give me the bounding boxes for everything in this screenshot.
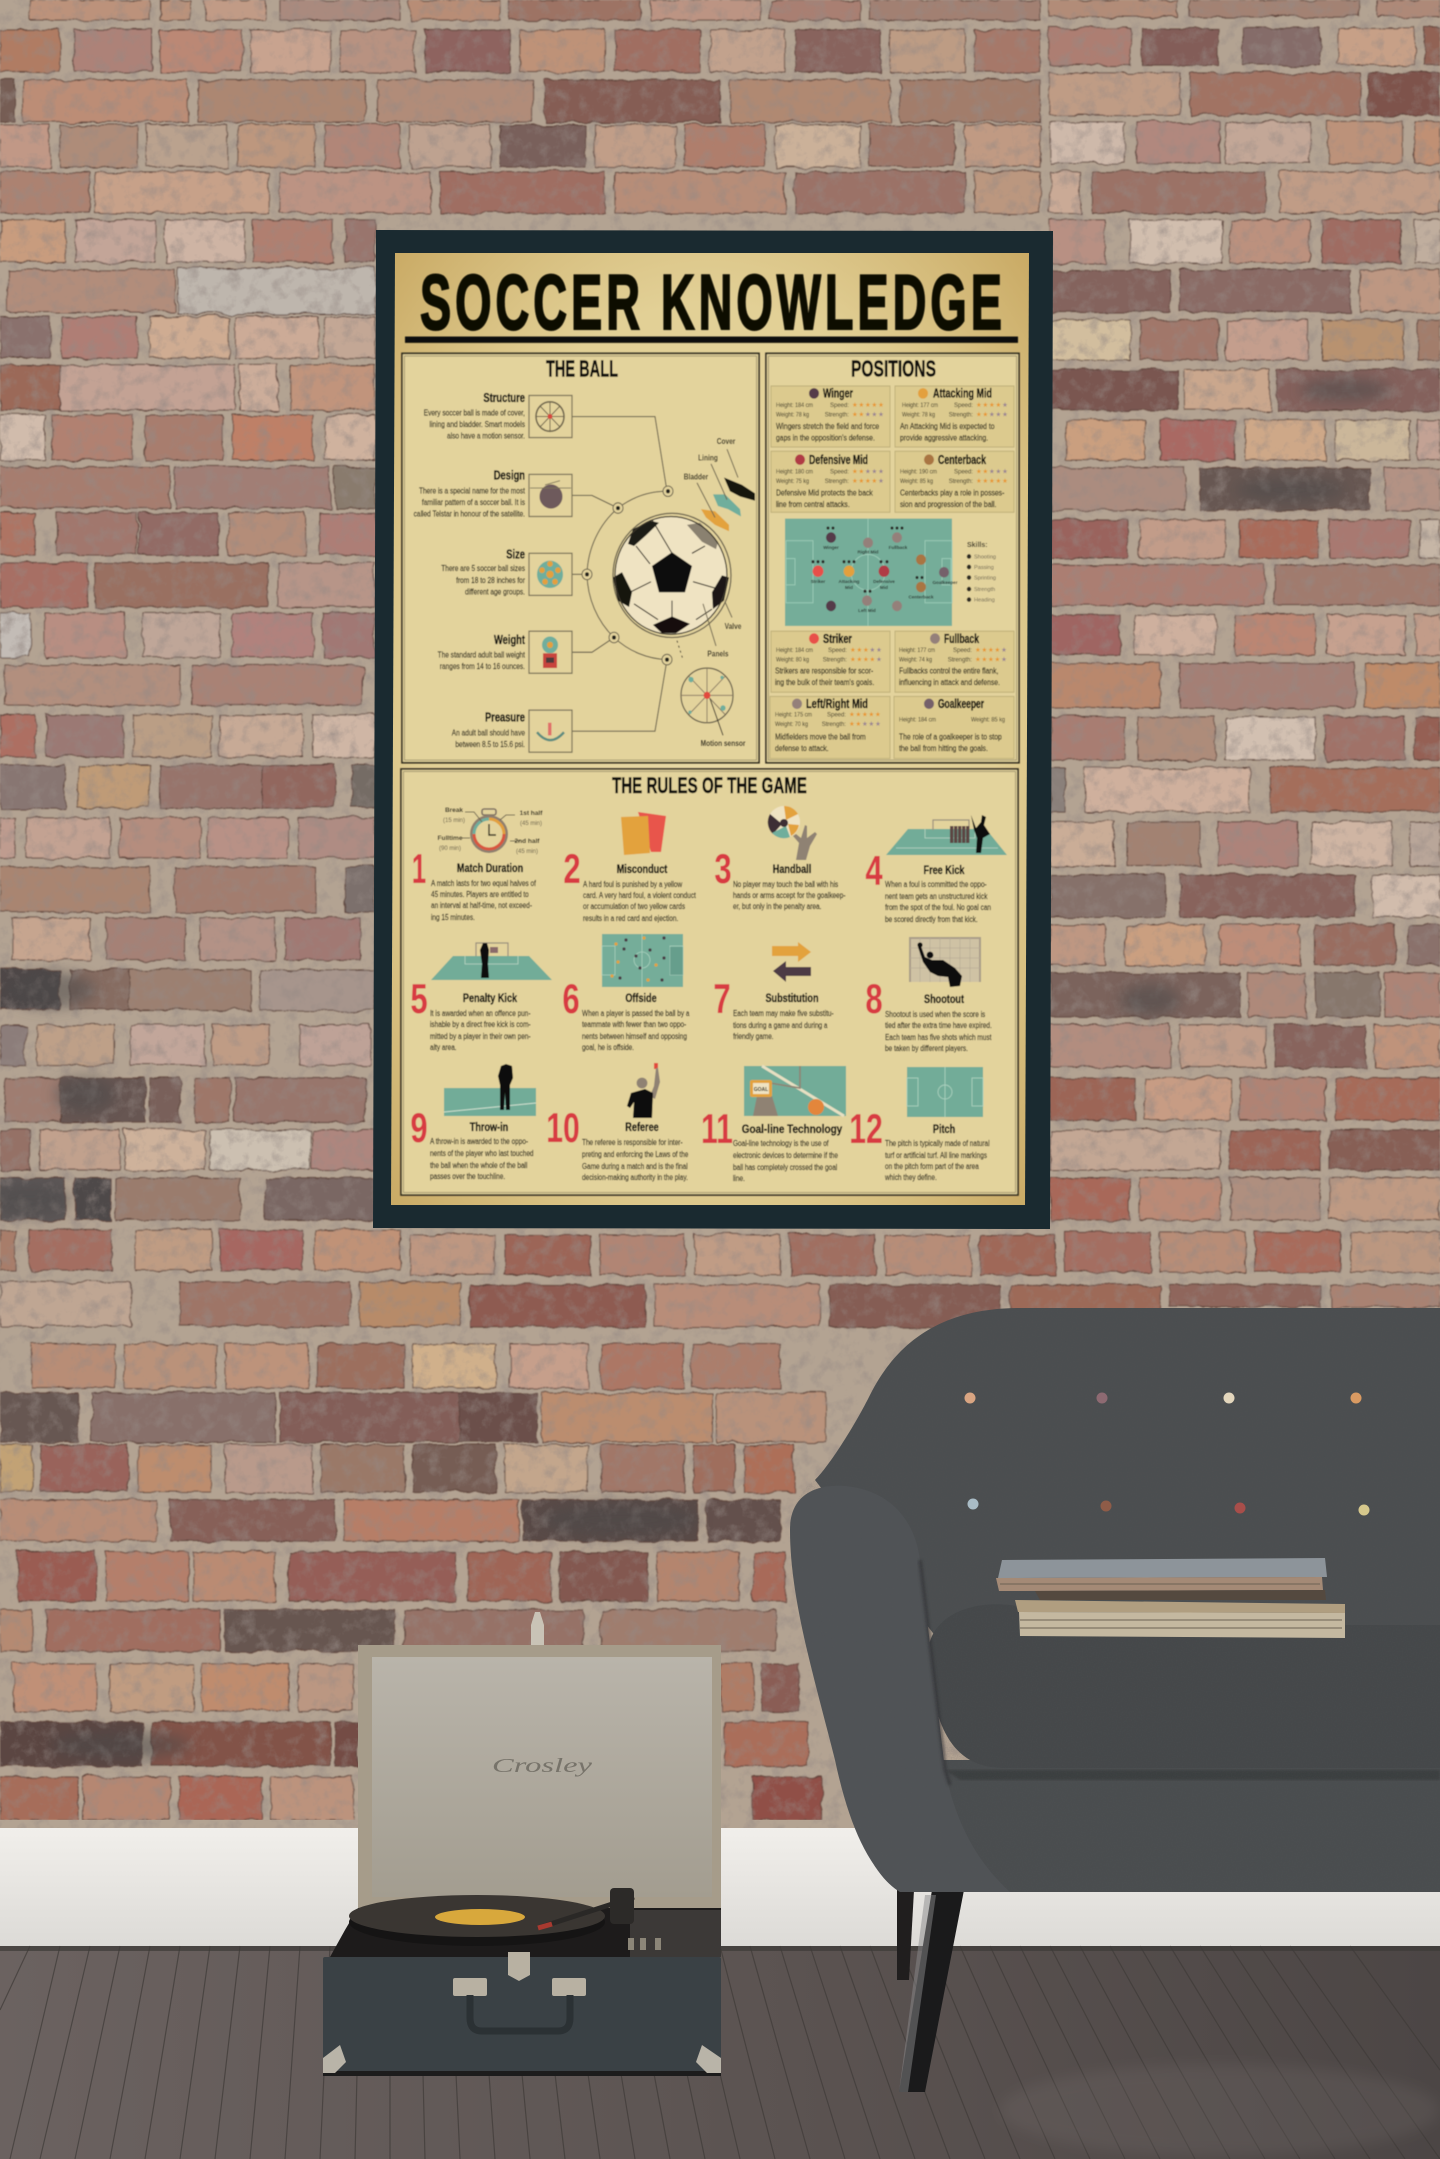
rule 11: goal-line technology: line.	[733, 1173, 745, 1183]
rule 2: misconduct: card. A very hard foul, a violent conduct	[583, 890, 696, 900]
ball callouts: valve and panels	[677, 602, 741, 660]
rule 1: match duration: 1	[412, 846, 426, 893]
card: left/right mid: ★★★★★	[849, 720, 882, 728]
card: striker: ing the bulk of their team's goals.	[775, 677, 874, 687]
card: left/right mid: Midfielders move the ball from	[775, 732, 866, 742]
rule 11: goal-line technology: Goal-line Technology	[742, 1123, 843, 1136]
player labels: Mid	[880, 585, 888, 591]
rule 10: referee: 10	[546, 1104, 580, 1151]
player labels	[811, 545, 958, 614]
rule 2: misconduct	[563, 812, 696, 923]
card: left/right mid: defense to attack.	[775, 743, 829, 753]
card: fullback: Fullback	[944, 631, 979, 646]
skills legend	[967, 541, 996, 604]
card: attacking mid: An Attacking Mid is expected to	[900, 421, 995, 431]
card: fullback: ★★★★★	[975, 646, 1008, 654]
rule 9: throw-in: A throw-in is awarded to the oppo-	[430, 1136, 529, 1146]
rule 10: referee	[546, 1063, 688, 1182]
rule 8: shootout: 8	[865, 975, 883, 1022]
brand script: Crosley	[492, 1755, 592, 1777]
rule 5: penalty kick: ishable by a direct free kick is com-	[430, 1019, 531, 1029]
card: goalkeeper: Weight: 85 kg	[971, 717, 1006, 724]
rule 3: handball: 3	[714, 845, 732, 892]
card: fullback: Speed:	[953, 647, 972, 654]
fabric texture	[790, 1308, 1440, 1892]
card: left/right mid: Height: 175 cm	[775, 711, 812, 718]
card: striker: Height: 184 cm	[776, 647, 813, 654]
card: attacking mid: Height: 177 cm	[902, 402, 938, 409]
item: structure: lining and bladder. Smart models	[430, 419, 525, 429]
record player	[323, 1612, 721, 2076]
ball layers: cover, lining, bladder: Bladder	[684, 472, 708, 482]
rule 2: misconduct: 2	[563, 845, 581, 892]
player labels: Attacking	[839, 579, 860, 585]
players	[812, 526, 949, 611]
player labels: Centerback	[908, 594, 934, 601]
rule 5: penalty kick: Penalty Kick	[463, 992, 517, 1005]
card: centerback: Height: 190 cm	[900, 468, 937, 475]
card: striker: Strength:	[823, 657, 847, 664]
card: winger: ★★★★★	[852, 410, 885, 419]
item: size: There are 5 soccer ball sizes	[441, 563, 525, 573]
card: striker: ★★★★★	[850, 656, 883, 664]
card: goalkeeper: Height: 184 cm	[899, 717, 936, 724]
card: defensive mid: Speed:	[830, 468, 849, 475]
card: left/right mid: ★★★★★	[849, 710, 882, 718]
tonearm	[538, 1888, 634, 1928]
card: left/right mid	[770, 696, 890, 759]
control section	[628, 1910, 721, 1957]
stopwatch labels	[438, 807, 543, 855]
back legs and front leg	[897, 1890, 964, 2092]
card: goalkeeper	[894, 696, 1014, 759]
rule 6: offside	[562, 934, 690, 1052]
rule 8: shootout: tied after the extra time have expired.	[885, 1020, 992, 1030]
rule 10: referee: decision-making authority in the play.	[582, 1172, 688, 1182]
rule 8: shootout: be taken by different players.	[885, 1043, 968, 1053]
open lid	[358, 1645, 721, 1911]
card: defensive mid: Weight: 75 kg	[776, 478, 810, 485]
item: pressure: between 8.5 to 15.6 psi.	[455, 739, 525, 749]
card: attacking mid: ★★★★★	[976, 401, 1009, 409]
card: attacking mid: ★★★★★	[976, 410, 1009, 419]
corner brackets	[323, 2045, 721, 2073]
rule 7: substitution: tions during a game and during a	[733, 1020, 828, 1030]
icon: stopwatch	[462, 809, 520, 853]
card: attacking mid	[895, 386, 1014, 447]
rule 6: offside: teammate with fewer than two oppo-	[582, 1019, 687, 1029]
white baseboard	[0, 1828, 1440, 1948]
player labels: Right Mid	[858, 549, 879, 555]
rule 4: free kick: nent team gets an unstructured kick	[885, 891, 988, 901]
rule 9: throw-in: Throw-in	[470, 1121, 508, 1134]
item: pressure: Preasure	[485, 711, 525, 725]
card: winger: gaps in the opposition's defense.	[776, 433, 875, 443]
card: striker: Striker	[823, 631, 852, 646]
ball layers: cover, lining, bladder: Cover	[717, 436, 735, 446]
rule 6: offside: goal, he is offside.	[582, 1042, 634, 1052]
rule 12: pitch: The pitch is typically made of natural	[885, 1138, 990, 1148]
rule 11: goal-line technology: Goal-line technology is the use of	[733, 1138, 829, 1148]
rule 9: throw-in: the ball when the whole of the ball	[430, 1160, 528, 1170]
rule 4: free kick: When a foul is committed the oppo-	[885, 879, 987, 889]
card: defensive mid: line from central attacks.	[776, 499, 850, 509]
card: defensive mid: Strength:	[825, 478, 849, 485]
rule 1: match duration: 45 minutes. Players are entitled to	[431, 889, 529, 899]
stopwatch labels: (90 min)	[439, 846, 461, 852]
rule 9: throw-in	[410, 1064, 536, 1181]
card: attacking mid: Attacking Mid	[933, 386, 992, 401]
icon: throw-in	[444, 1064, 536, 1116]
stopwatch labels: Break	[445, 807, 463, 814]
rule 7: substitution	[713, 942, 834, 1041]
icon: goal-line technology	[744, 1066, 846, 1116]
latches	[453, 1952, 586, 1996]
rule 5: penalty kick: alty area.	[430, 1042, 457, 1052]
item: structure: Structure	[483, 392, 525, 405]
card: centerback: Speed:	[954, 468, 973, 475]
rule 12: pitch: 12	[849, 1105, 883, 1152]
card: left/right mid: Left/Right Mid	[806, 697, 868, 711]
rule 12: pitch: on the pitch form part of the area	[885, 1161, 980, 1171]
card: winger: Speed:	[830, 402, 849, 409]
stopwatch labels: (45 min)	[520, 821, 542, 827]
rule 1: match duration	[412, 807, 543, 922]
stopwatch labels: 2nd half	[515, 838, 540, 845]
rule 8: shootout	[865, 938, 992, 1053]
rule 4: free kick: be scored directly from that kick.	[885, 914, 978, 924]
player labels: Winger	[823, 545, 839, 551]
rule 9: throw-in: passes over the touchline.	[430, 1171, 505, 1181]
poster paper	[391, 253, 1029, 1205]
skills legend: Sprinting	[974, 576, 996, 582]
rule 2: misconduct: or accumulation of two yellow cards	[583, 901, 685, 911]
card: winger: Wingers stretch the field and force	[776, 421, 879, 431]
item: structure: Every soccer ball is made of cover,	[424, 408, 525, 418]
icon: pitch	[907, 1067, 983, 1117]
chair arm	[790, 1486, 1010, 1892]
card: striker: Strikers are responsible for scor-	[775, 666, 874, 676]
rule 5: penalty kick: mitted by a player in their own pen-	[430, 1031, 531, 1041]
rule 12: pitch: which they define.	[884, 1172, 937, 1182]
rule 7: substitution: 7	[713, 975, 731, 1022]
framed poster	[373, 230, 1053, 1229]
rule 10: referee: preting and enforcing the Laws of the	[582, 1149, 688, 1159]
rule 6: offside: Offside	[625, 992, 657, 1005]
item: weight: Weight	[494, 634, 525, 647]
item: pressure: An adult ball should have	[452, 727, 525, 738]
skills legend: Skills:	[967, 541, 988, 549]
card: fullback: Weight: 74 kg	[899, 657, 933, 664]
formation pitch	[785, 519, 958, 626]
rule 2: misconduct: A hard foul is punished by a yellow	[583, 879, 683, 889]
rule 2: misconduct: Misconduct	[617, 863, 668, 876]
vinyl record	[349, 1895, 605, 1946]
turntable deck	[330, 1908, 721, 1957]
card: winger: ★★★★★	[852, 401, 885, 409]
rule 3: handball: No player may touch the ball with his	[733, 879, 839, 889]
rule 1: match duration: A match lasts for two equal halves of	[431, 878, 537, 888]
card: defensive mid: ★★★★★	[852, 467, 885, 475]
rule 1: match duration: Match Duration	[457, 862, 523, 875]
icon: ball and hand	[768, 806, 817, 860]
card: attacking mid: provide aggressive attacking.	[900, 433, 988, 443]
arm shadow	[920, 1560, 950, 1785]
card: attacking mid: Weight: 78 kg	[902, 411, 936, 419]
card: defensive mid	[771, 451, 890, 512]
card: goalkeeper: The role of a goalkeeper is to stop	[899, 732, 1002, 742]
rule 9: throw-in: nents of the player who last touched	[430, 1148, 534, 1158]
lid latch	[531, 1612, 544, 1645]
card: goalkeeper: Goalkeeper	[938, 697, 984, 711]
heading: rules: THE RULES OF THE GAME	[612, 773, 807, 798]
card: attacking mid: Speed:	[954, 402, 973, 409]
player labels: Left Mid	[858, 608, 876, 614]
heading: the ball: THE BALL	[546, 356, 618, 382]
card: centerback: Centerbacks play a role in posses-	[900, 488, 1005, 498]
item: size: different age groups.	[465, 586, 525, 597]
rule 6: offside: 6	[562, 975, 580, 1022]
stopwatch labels: (45 min)	[516, 849, 538, 855]
rule 8: shootout: Each team has five shots which must	[885, 1032, 991, 1042]
rule 4: free kick	[865, 815, 1007, 924]
card: fullback: Fullbacks control the entire flank,	[899, 666, 998, 676]
item: structure: also have a motion sensor.	[447, 431, 525, 441]
card: fullback: Strength:	[948, 657, 972, 664]
player labels: Fullback	[889, 545, 908, 551]
item: weight	[438, 631, 572, 673]
armchair	[790, 1308, 1440, 2092]
icon: goalkeeper	[910, 938, 980, 987]
icon: arrows	[772, 942, 811, 982]
skills legend: Passing	[974, 565, 994, 571]
card: left/right mid: Speed:	[827, 711, 846, 718]
stopwatch labels: (15 min)	[443, 818, 465, 824]
connector nodes	[582, 486, 673, 665]
rule 10: referee: Game during a match and is the final	[582, 1161, 688, 1171]
rule 11: goal-line technology: ball has completely crossed the goal	[733, 1162, 838, 1172]
motion sensor: Motion sensor	[701, 738, 745, 748]
panel: positions	[766, 353, 1019, 763]
player labels: Striker	[811, 579, 825, 585]
rule 7: substitution: friendly game.	[733, 1031, 774, 1041]
rule 4: free kick: from the spot of the foul. No goal can	[885, 902, 991, 912]
card: defensive mid: Defensive Mid	[809, 453, 868, 467]
poster frame	[373, 230, 1053, 1229]
ball layers: cover, lining, bladder: Lining	[698, 453, 718, 463]
player labels: Mid	[845, 585, 853, 591]
card: fullback: Height: 177 cm	[899, 647, 935, 654]
card: striker	[771, 631, 890, 692]
rule 6: offside: nents between himself and opposing	[582, 1031, 687, 1041]
player labels: Goalkeeper	[932, 580, 958, 586]
rule 9: throw-in: 9	[410, 1104, 428, 1151]
card: centerback: ★★★★★	[976, 477, 1009, 485]
item: design: Design	[494, 469, 525, 483]
item: design	[414, 469, 572, 519]
card: winger: Weight: 78 kg	[776, 411, 810, 419]
card: left/right mid: Weight: 70 kg	[775, 721, 809, 728]
icon: referee	[627, 1063, 660, 1118]
icon: cards	[621, 812, 666, 855]
card: striker: ★★★★★	[850, 646, 883, 654]
rule 3: handball	[714, 806, 846, 911]
connectors	[572, 417, 668, 731]
panel: the ball	[402, 353, 759, 763]
rule 5: penalty kick: 5	[410, 975, 428, 1022]
ball callouts: valve and panels: Panels	[707, 649, 729, 659]
skills legend: Heading	[974, 598, 995, 604]
card: defensive mid: Height: 180 cm	[776, 468, 813, 475]
stopwatch labels: Fulltime	[438, 835, 463, 842]
rule 8: shootout: Shootout is used when the score is	[885, 1009, 986, 1019]
card: left/right mid: Strength:	[822, 721, 846, 728]
item: structure	[424, 392, 572, 441]
item: pressure	[452, 710, 572, 752]
wooden floor	[0, 1946, 1440, 2159]
rule 11: goal-line technology	[701, 1066, 846, 1183]
icon: goal-line technology: GOAL	[754, 1087, 768, 1093]
player labels: Defensive	[873, 579, 895, 585]
rule 6: offside: When a player is passed the ball by a	[582, 1008, 690, 1018]
card: winger: Strength:	[825, 411, 849, 419]
card: striker: Speed:	[828, 647, 847, 654]
card: fullback	[895, 631, 1014, 692]
chair back	[815, 1308, 1440, 1720]
title rule	[405, 337, 1018, 343]
rule 11: goal-line technology: electronic devices to determine if the	[733, 1150, 838, 1160]
heading: positions: POSITIONS	[851, 356, 936, 382]
rule 2: misconduct: results in a red card and ejection.	[583, 913, 678, 923]
handle	[470, 1995, 570, 2031]
card: centerback: ★★★★★	[976, 467, 1009, 475]
chair seat cushion	[928, 1604, 1440, 1768]
soccer ball	[613, 513, 731, 638]
card: defensive mid: ★★★★★	[852, 477, 885, 485]
icon: offside pitch	[602, 934, 683, 987]
rule 4: free kick: Free Kick	[923, 864, 965, 877]
rule 11: goal-line technology: 11	[701, 1105, 733, 1152]
motion sensor	[681, 668, 745, 748]
rule 12: pitch: Pitch	[933, 1123, 955, 1136]
rule 3: handball: hands or arms accept for the goalkeep-	[733, 890, 846, 900]
icon: free kick	[886, 815, 1007, 855]
item: design: There is a special name for the most	[419, 485, 526, 496]
card: centerback: sion and progression of the ball.	[900, 499, 996, 509]
chair base	[850, 1760, 1440, 1892]
ball layers: cover, lining, bladder	[684, 436, 755, 531]
item: design: familiar pattern of a soccer ball. It is	[422, 497, 525, 507]
item: design: called Telstar in honour of the satellite.	[414, 509, 525, 519]
stopwatch labels: 1st half	[520, 810, 543, 817]
item: weight: The standard adult ball weight	[438, 650, 526, 660]
card: fullback: ★★★★★	[975, 656, 1008, 664]
card: defensive mid: Defensive Mid protects the back	[776, 488, 873, 498]
ball callouts: valve and panels: Valve	[725, 621, 741, 631]
upper poster section	[402, 259, 1019, 763]
suitcase base	[323, 1957, 721, 2073]
item: weight: ranges from 14 to 16 ounces.	[440, 661, 525, 671]
case shadow on floor	[323, 2071, 721, 2076]
rule 12: pitch: turf or artificial turf. All line markings	[885, 1150, 987, 1160]
item: size: Size	[506, 548, 525, 562]
card: striker: Weight: 80 kg	[776, 657, 810, 664]
rule 3: handball: er, but only in the penalty area.	[733, 901, 821, 911]
tufting buttons	[964, 1392, 1370, 1516]
item: size	[441, 548, 572, 597]
skills legend: Shooting	[974, 554, 996, 561]
rule 10: referee: The referee is responsible for inter-	[582, 1137, 683, 1147]
icon: penalty	[431, 943, 552, 980]
card: goalkeeper: the ball from hitting the goals.	[899, 743, 988, 753]
seat shadow	[945, 1770, 1440, 1780]
card: centerback: Centerback	[938, 453, 986, 467]
skills legend: Strength	[974, 587, 995, 593]
rule 5: penalty kick: It is awarded when an offence pun-	[430, 1008, 531, 1018]
card: winger	[771, 386, 890, 447]
panel: the rules of the game	[401, 769, 1018, 1195]
rule 7: substitution: Substitution	[765, 992, 819, 1005]
rule 1: match duration: ing 15 minutes.	[431, 912, 475, 922]
item: size: from 18 to 28 inches for	[456, 575, 525, 585]
rule 10: referee: Referee	[625, 1121, 659, 1134]
card: attacking mid: Strength:	[949, 411, 973, 419]
card: winger: Winger	[823, 386, 853, 401]
card: fullback: influencing in attack and defense.	[899, 677, 1000, 687]
lid lining	[372, 1657, 712, 1897]
card: centerback	[895, 451, 1014, 512]
card: centerback: Strength:	[949, 478, 973, 485]
stack of records	[996, 1558, 1345, 1638]
card: centerback: Weight: 85 kg	[900, 478, 934, 485]
rule 7: substitution: Each team may make five substitu-	[733, 1008, 834, 1018]
rule 12: pitch	[849, 1067, 990, 1182]
rule 5: penalty kick	[410, 943, 552, 1052]
card: winger: Height: 184 cm	[776, 402, 813, 409]
rule 8: shootout: Shootout	[924, 993, 964, 1006]
title: SOCCER KNOWLEDGE	[420, 259, 1006, 346]
rule 1: match duration: an interval at half-time, not exceed-	[431, 900, 532, 910]
rule 4: free kick: 4	[865, 847, 883, 894]
rule 3: handball: Handball	[773, 863, 811, 876]
